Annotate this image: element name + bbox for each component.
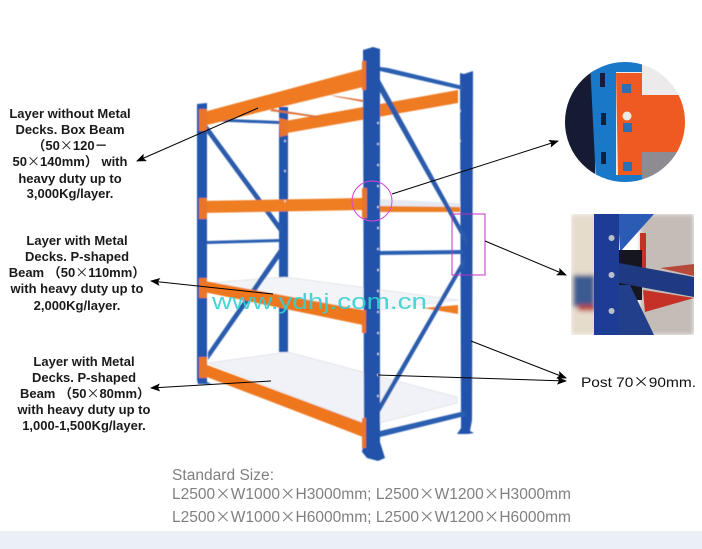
label: p-shaped beam 50x110: Decks. P-shaped (25, 249, 129, 264)
label: post size: Post 70 ×90mm. (581, 372, 696, 392)
red object (578, 305, 596, 311)
blue object (573, 275, 595, 307)
label: p-shaped beam 50x110: 2,000Kg/layer. (34, 298, 120, 313)
brace bottom (618, 285, 654, 335)
arrow: top beam to label (137, 108, 258, 161)
bolt (622, 112, 632, 120)
label: layer without metal decks (9, 106, 131, 201)
label: layer without metal decks: Layer without Metal (9, 106, 131, 121)
side bars (207, 67, 465, 437)
bolts (609, 235, 615, 314)
label: layer without metal decks: heavy duty up to (18, 171, 122, 186)
label: p-shaped beam 50x80 (17, 354, 151, 433)
red upright (640, 233, 646, 268)
post (594, 214, 619, 335)
bottom deck (208, 352, 457, 423)
label: p-shaped beam 50x80: Beam （50×80mm） (20, 383, 150, 402)
top cross bars (270, 95, 363, 118)
arrow: front post to post label (378, 375, 566, 381)
label: layer without metal decks: 3,000Kg/layer. (27, 186, 113, 201)
label: p-shaped beam 50x110 (9, 233, 145, 313)
diagonal braces (207, 80, 467, 412)
second level rear deck (380, 199, 460, 207)
label: p-shaped beam 50x80: Layer with Metal (33, 354, 135, 369)
label: p-shaped beam 50x80: with heavy duty up to (17, 402, 151, 417)
footer band (0, 531, 702, 549)
label: layer without metal decks: 50×140mm） with (13, 151, 128, 170)
post holes (285, 110, 460, 397)
arrow: circle to connector photo (392, 141, 558, 194)
detail photo: post and brace (571, 214, 694, 335)
left front post (197, 103, 212, 384)
white coat (571, 214, 594, 335)
arrow: rear post to post label (471, 341, 566, 378)
watermark: www.ydhj.com.cn (211, 289, 427, 314)
label: p-shaped beam 50x80: Decks. P-shaped (32, 370, 136, 385)
label: p-shaped beam 50x110: Beam （50×110mm） (9, 262, 145, 281)
photo background (595, 64, 678, 175)
connector slots (622, 84, 632, 171)
standard size text: Standard Size: (172, 467, 274, 484)
standard size text (172, 467, 571, 527)
arrow: middle deck to label (151, 281, 273, 294)
beam end plates (199, 61, 367, 448)
horizontal bar (619, 263, 694, 297)
top rear beam (285, 90, 458, 133)
second level rear beam (380, 206, 460, 212)
label: layer without metal decks: Decks. Box Beam (15, 122, 125, 137)
top front beam (200, 69, 363, 125)
rear left post (279, 107, 288, 352)
standard size text: L2500×W1000×H6000mm; L2500×W1200×H6000mm (172, 505, 571, 527)
label: layer without metal decks: （50×120－ (32, 135, 108, 154)
third level deck (207, 277, 458, 312)
second level front beam (199, 198, 363, 213)
arrow: bottom deck to label (151, 381, 271, 388)
label: p-shaped beam 50x80: 1,000-1,500Kg/layer. (22, 418, 146, 433)
post slots (600, 73, 606, 164)
centre front post (362, 47, 385, 461)
dark background (565, 70, 595, 174)
orange connector plate (616, 73, 685, 175)
detail photo: beam connector (565, 62, 685, 182)
dark gap (618, 250, 642, 300)
blurred background (571, 214, 694, 335)
third level front beam (199, 280, 363, 325)
illustration: storage rack (197, 47, 474, 461)
third level rear beam (423, 305, 458, 314)
highlight rectangle (452, 214, 485, 275)
rear right post (457, 71, 474, 434)
red panel (643, 290, 694, 312)
highlight circle (352, 181, 392, 221)
grey wall (640, 214, 694, 335)
standard size text: L2500×W1000×H3000mm; L2500×W1200×H3000mm (172, 482, 571, 504)
bottom front beam (199, 362, 363, 437)
label: p-shaped beam 50x110: with heavy duty up to (10, 281, 144, 296)
brace top (618, 214, 654, 252)
arrow: rectangle to brace photo (485, 241, 566, 275)
blue post (590, 62, 642, 182)
label: p-shaped beam 50x110: Layer with Metal (26, 233, 128, 248)
red strip (660, 264, 694, 276)
grey deck (642, 152, 677, 180)
